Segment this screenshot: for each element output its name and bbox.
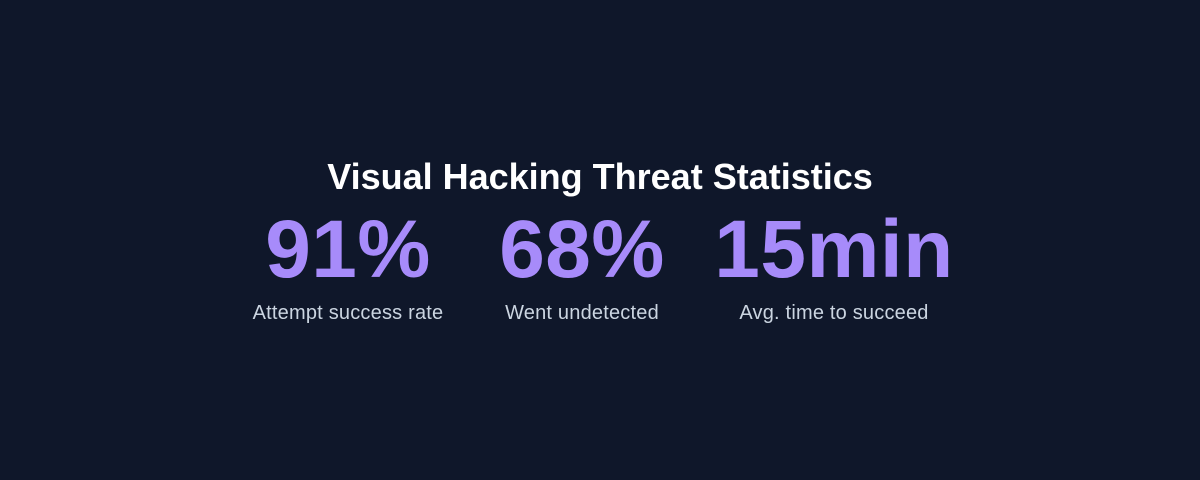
title: Visual Hacking Threat Statistics xyxy=(327,156,873,197)
stat: attempt success rate: Attempt success rate xyxy=(253,302,443,324)
stat: attempt success rate: 91% xyxy=(265,204,431,295)
stat: avg time: 15min xyxy=(714,204,954,295)
stat: attempt success rate xyxy=(252,204,443,324)
stat: went undetected: 68% xyxy=(499,204,665,295)
stat: went undetected: Went undetected xyxy=(505,302,659,324)
stat: avg time: Avg. time to succeed xyxy=(739,302,929,324)
